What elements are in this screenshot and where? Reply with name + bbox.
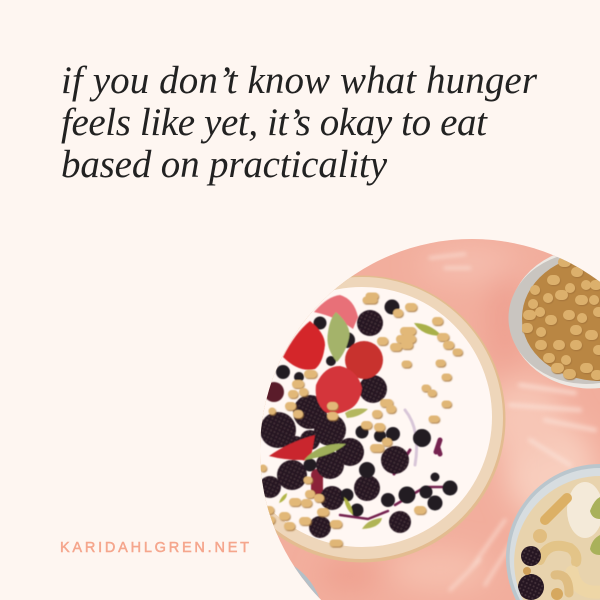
top right granola bowl: [508, 247, 600, 388]
leaves: [279, 312, 442, 529]
blackberries: [259, 310, 411, 538]
website credit: KARIDAHLGREN.NET: [60, 540, 249, 556]
title: feels like yet, it’s okay to eat: [61, 101, 488, 144]
bottom right nut bowl: [506, 464, 600, 600]
bottom left bowl rim: [294, 566, 320, 598]
berry juice swirls: [317, 410, 450, 519]
circular food photo: [260, 239, 600, 600]
title: based on practicality: [61, 143, 388, 186]
pink marble surface: [260, 239, 600, 600]
title: if you don’t know what hunger: [61, 59, 538, 102]
blueberries: [276, 300, 458, 516]
yogurt: [260, 287, 492, 547]
granola on plate: [263, 296, 459, 543]
title: [61, 59, 538, 186]
plate toppings: [259, 295, 459, 543]
plate rim: [260, 276, 506, 562]
strawberries: [269, 295, 383, 460]
